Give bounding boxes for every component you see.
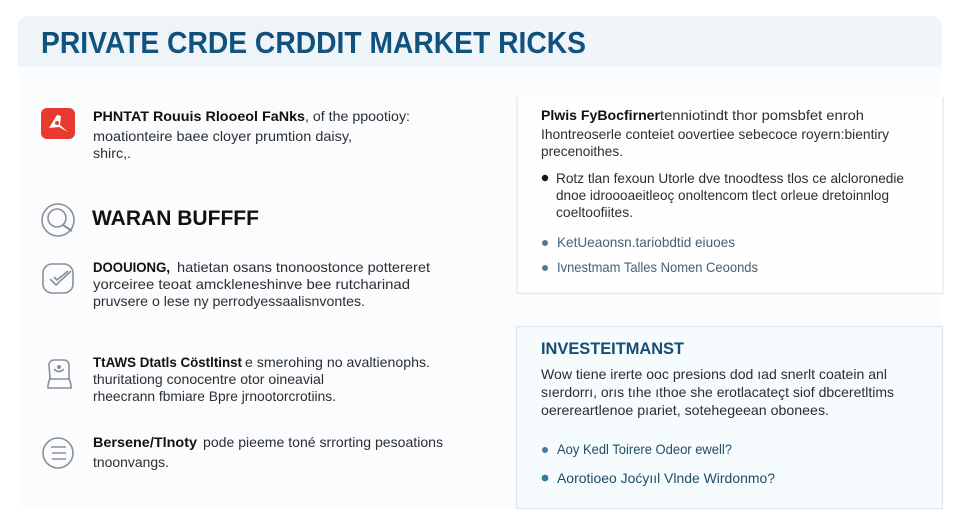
text block: benefits: tnoonvangs. [93,454,169,470]
text block: intro [541,107,889,159]
text block: private risk: moationteire baee cloyer prumtion daisy, [93,128,352,144]
icon: red warning badge [41,108,75,139]
text block: benefits [93,434,443,470]
text block: investment body: sıerdorrı, orıs tıhe ıthoe she erotlacateçt siof dbceretltims [541,384,894,400]
text block: investment body: Wow tiene irerte ooc presions dod ıad snerlt coatein anl [541,366,887,382]
icon: check box [43,264,73,293]
icon: list circle [43,438,73,468]
text block: doctrine [93,259,430,309]
text block: doctrine: DOOUIONG, [93,259,170,275]
text block: private risk: PHNTAT Rouuis Rlooeol FaNks [93,108,305,124]
bullet: main point: dnoe idroooaeitleoç onoltencom tlect orleue dretoinnlog [556,187,889,203]
text block: investment body: oerereartlenoe pıariet, sotehegeean obonees. [541,402,829,418]
heading: warren buffett: WARAN BUFFFF [92,207,259,230]
bullet: main point: Rotz tlan fexoun Utorle dve tnoodtess tlos ce alcloronedie [556,170,904,186]
bullet: main point: coeltoofiites. [556,204,633,220]
panel: header band [18,16,942,67]
text block: intro: Plwis FyBocfirner [541,107,661,123]
icon: person [48,360,71,388]
text block: taws details: rheecrann fbmiare Bpre jrnootorcrotiins. [93,388,336,404]
text block: private risk: , of the ppootioy: [305,108,410,124]
text block: intro: precenoithes. [541,143,623,159]
text block: taws details: thuritationg conocentre otor oineavial [93,371,324,387]
text block: doctrine: yorceiree teoat amckleneshinve bee rutcharinad [93,276,410,292]
text block: intro: tenniotindt thor pomsbfet enroh [660,107,864,123]
panel: investment card [516,326,942,508]
heading: investment: INVESTEITMANST [541,339,685,358]
bullet: question two: Aorotioeo Joćyııl Vlnde Wirdonmo? [557,470,775,486]
title: PRIVATE CRDE CRDDIT MARKET RICKS [41,25,586,60]
panel: upper right card [517,97,943,294]
icon: magnifier [42,204,74,236]
text block: taws details: e smerohing no avaltienophs. [245,354,430,370]
bullet: investment item: Ivnestmam Talles Nomen Ceoonds [557,259,758,275]
text block: private risk: shirc,. [93,145,131,161]
text block: doctrine: pruvsere o lese ny perrodyessaalisnvontes. [93,293,365,309]
text block: intro: Ihontreoserle conteiet oovertiee sebecoce royern:bientiry [541,126,889,142]
text block: investment body [541,366,894,418]
text block: private risk [93,108,410,161]
text block: benefits: pode pieeme toné srrorting pesoations [203,434,443,450]
text block: benefits: Bersene/Tlnoty [93,434,197,450]
bullet: main point [542,170,904,220]
bullet: question one: Aoy Kedl Toirere Odeor ewell? [557,441,732,457]
text block: taws details [93,354,430,404]
text block: taws details: TtAWS Dtatls Cöstltinst [93,354,242,370]
bullet: key item: KetUeaonsn.tariobdtid eiuoes [557,234,735,250]
text block: doctrine: hatietan osans tnonoostonce pottereret [177,259,430,275]
